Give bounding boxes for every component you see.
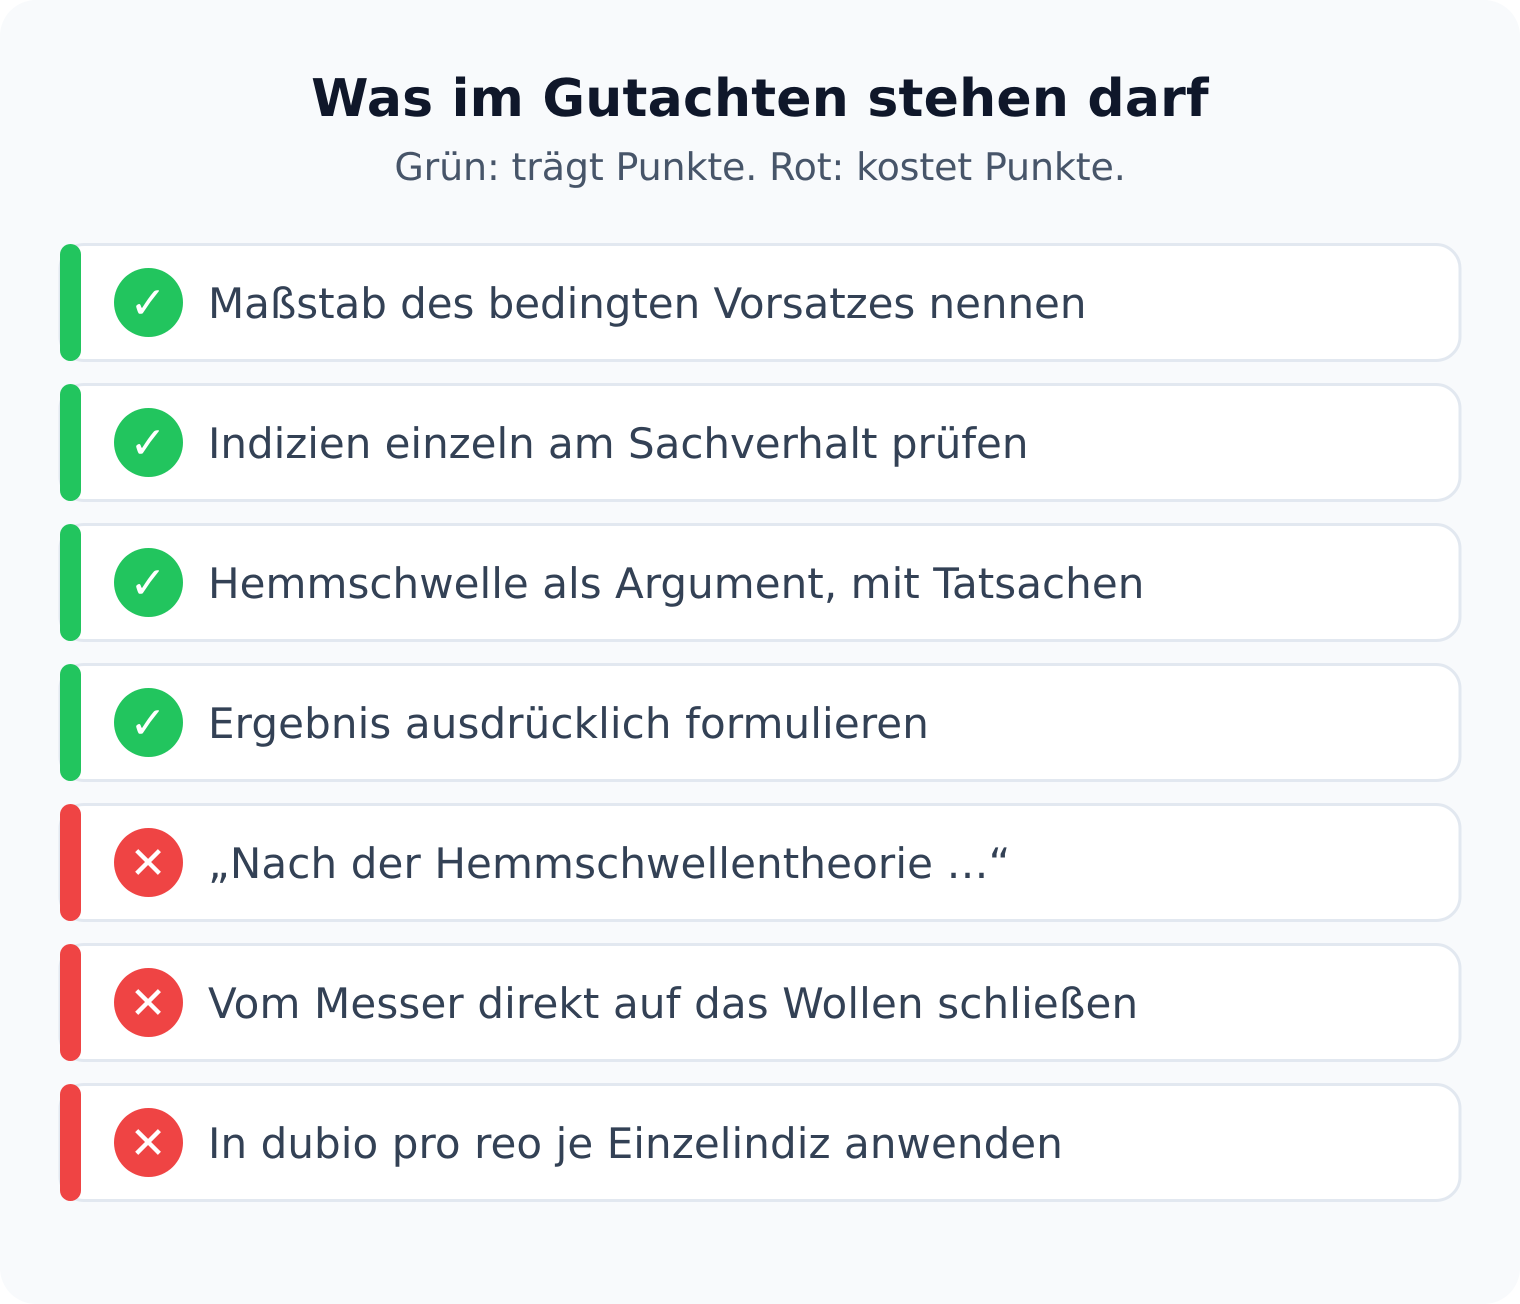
row: Hemmschwelle als Argument: Hemmschwelle als Argument, mit Tatsachen — [208, 559, 1144, 608]
row: Hemmschwelle als Argument: ✓ — [130, 558, 166, 609]
row: Vom Messer schließen — [60, 944, 1460, 1061]
row: In dubio pro reo: ✕ — [130, 1118, 166, 1169]
row: Indizien prüfen: Indizien einzeln am Sachverhalt prüfen — [208, 419, 1028, 468]
row: Hemmschwelle als Argument — [60, 524, 1460, 641]
row: Maßstab nennen: ✓ — [130, 278, 166, 329]
row: Hemmschwellentheorie — [60, 804, 1460, 921]
row: In dubio pro reo: In dubio pro reo je Einzelindiz anwenden — [208, 1119, 1063, 1168]
row: Maßstab nennen — [60, 244, 1460, 361]
row: Ergebnis formulieren: Ergebnis ausdrücklich formulieren — [208, 699, 929, 748]
row: Hemmschwellentheorie: ✕ — [130, 838, 166, 889]
row: Vom Messer schließen: ✕ — [130, 978, 166, 1029]
row: Indizien prüfen — [60, 384, 1460, 501]
row: Hemmschwellentheorie: „Nach der Hemmschwellentheorie …“ — [208, 839, 1011, 888]
row: Vom Messer schließen: Vom Messer direkt auf das Wollen schließen — [208, 979, 1138, 1028]
row: Ergebnis formulieren — [60, 664, 1460, 781]
row: Maßstab nennen: Maßstab des bedingten Vorsatzes nennen — [208, 279, 1086, 328]
row: In dubio pro reo — [60, 1084, 1460, 1201]
row: Ergebnis formulieren: ✓ — [130, 698, 166, 749]
title: Was im Gutachten stehen darf — [311, 69, 1210, 129]
row: Indizien prüfen: ✓ — [130, 418, 166, 469]
subtitle: Grün: trägt Punkte. Rot: kostet Punkte. — [394, 145, 1126, 189]
